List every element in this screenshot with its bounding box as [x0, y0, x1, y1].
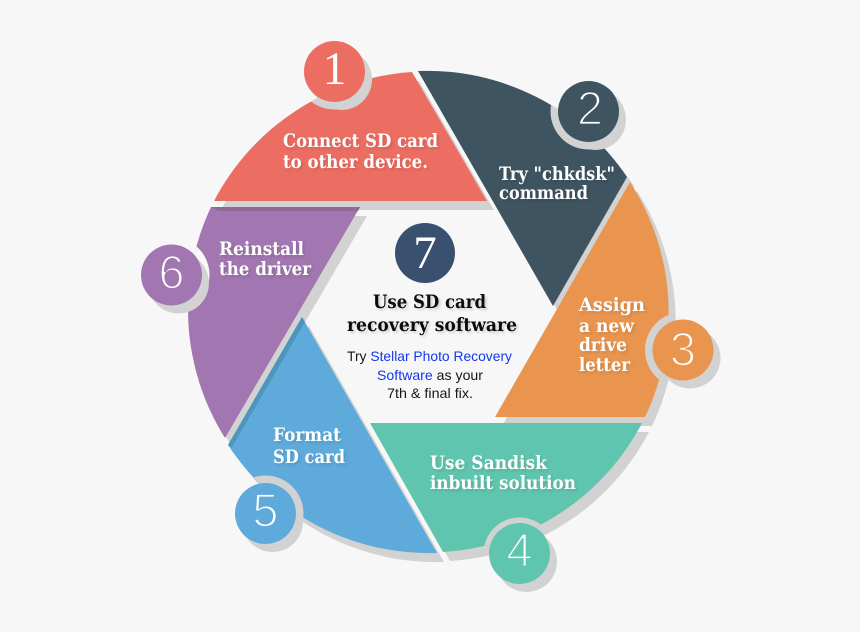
panel: step 7 centre: Use SD card: [373, 292, 486, 313]
panel: step 7 centre: 7: [413, 227, 437, 279]
panel: step 3 assign a new drive letter: letter: [579, 355, 630, 376]
panel: step 7 centre: Software as your: [377, 367, 483, 383]
panel: step 7 centre: [347, 223, 517, 401]
panel: step 6 reinstall the driver: 6: [158, 246, 185, 298]
panel: step 6 reinstall the driver: [134, 207, 360, 438]
panel: step 7 centre: Try Stellar Photo Recovery: [347, 348, 512, 364]
panel: step 1 connect SD card: Connect SD card: [283, 131, 438, 152]
panel: step 2 try chkdsk command: 2: [577, 82, 603, 134]
panel: step 5 format SD card: 5: [252, 484, 279, 536]
panel: step 4 use Sandisk inbuilt solution: 4: [506, 524, 533, 576]
panel: step 3 assign a new drive letter: [495, 182, 721, 417]
panel: step 2 try chkdsk command: command: [499, 183, 588, 204]
panel: step 3 assign a new drive letter: Assign: [578, 295, 646, 316]
panel: step 6 reinstall the driver: Reinstall: [219, 239, 304, 260]
panel: step 5 format SD card: SD card: [273, 447, 345, 468]
panel: step 2 try chkdsk command: Try "chkdsk": [499, 164, 615, 185]
panel: step 4 use Sandisk inbuilt solution: inbuilt solution: [430, 473, 576, 494]
panel: step 4 use Sandisk inbuilt solution: [370, 423, 642, 592]
panel: step 3 assign a new drive letter: drive: [579, 335, 627, 356]
panel: step 2 try chkdsk command: [418, 71, 627, 306]
panel: step 3 assign a new drive letter: 3: [670, 322, 696, 376]
panel: step 4 use Sandisk inbuilt solution: Use Sandisk: [430, 453, 548, 474]
panel: step 1 connect SD card: [214, 34, 487, 201]
panel: step 1 connect SD card: 1: [323, 43, 346, 95]
panel: step 7 centre: 7th & final fix.: [387, 385, 473, 401]
panel: step 3 assign a new drive letter: a new: [579, 316, 635, 337]
panel: step 6 reinstall the driver: the driver: [219, 259, 311, 280]
panel: step 7 centre: recovery software: [347, 315, 517, 336]
panel: step 5 format SD card: Format: [273, 425, 341, 446]
segment drop shadows: [195, 80, 676, 562]
panel: step 5 format SD card: [228, 317, 437, 553]
panel: step 1 connect SD card: to other device.: [283, 152, 428, 173]
